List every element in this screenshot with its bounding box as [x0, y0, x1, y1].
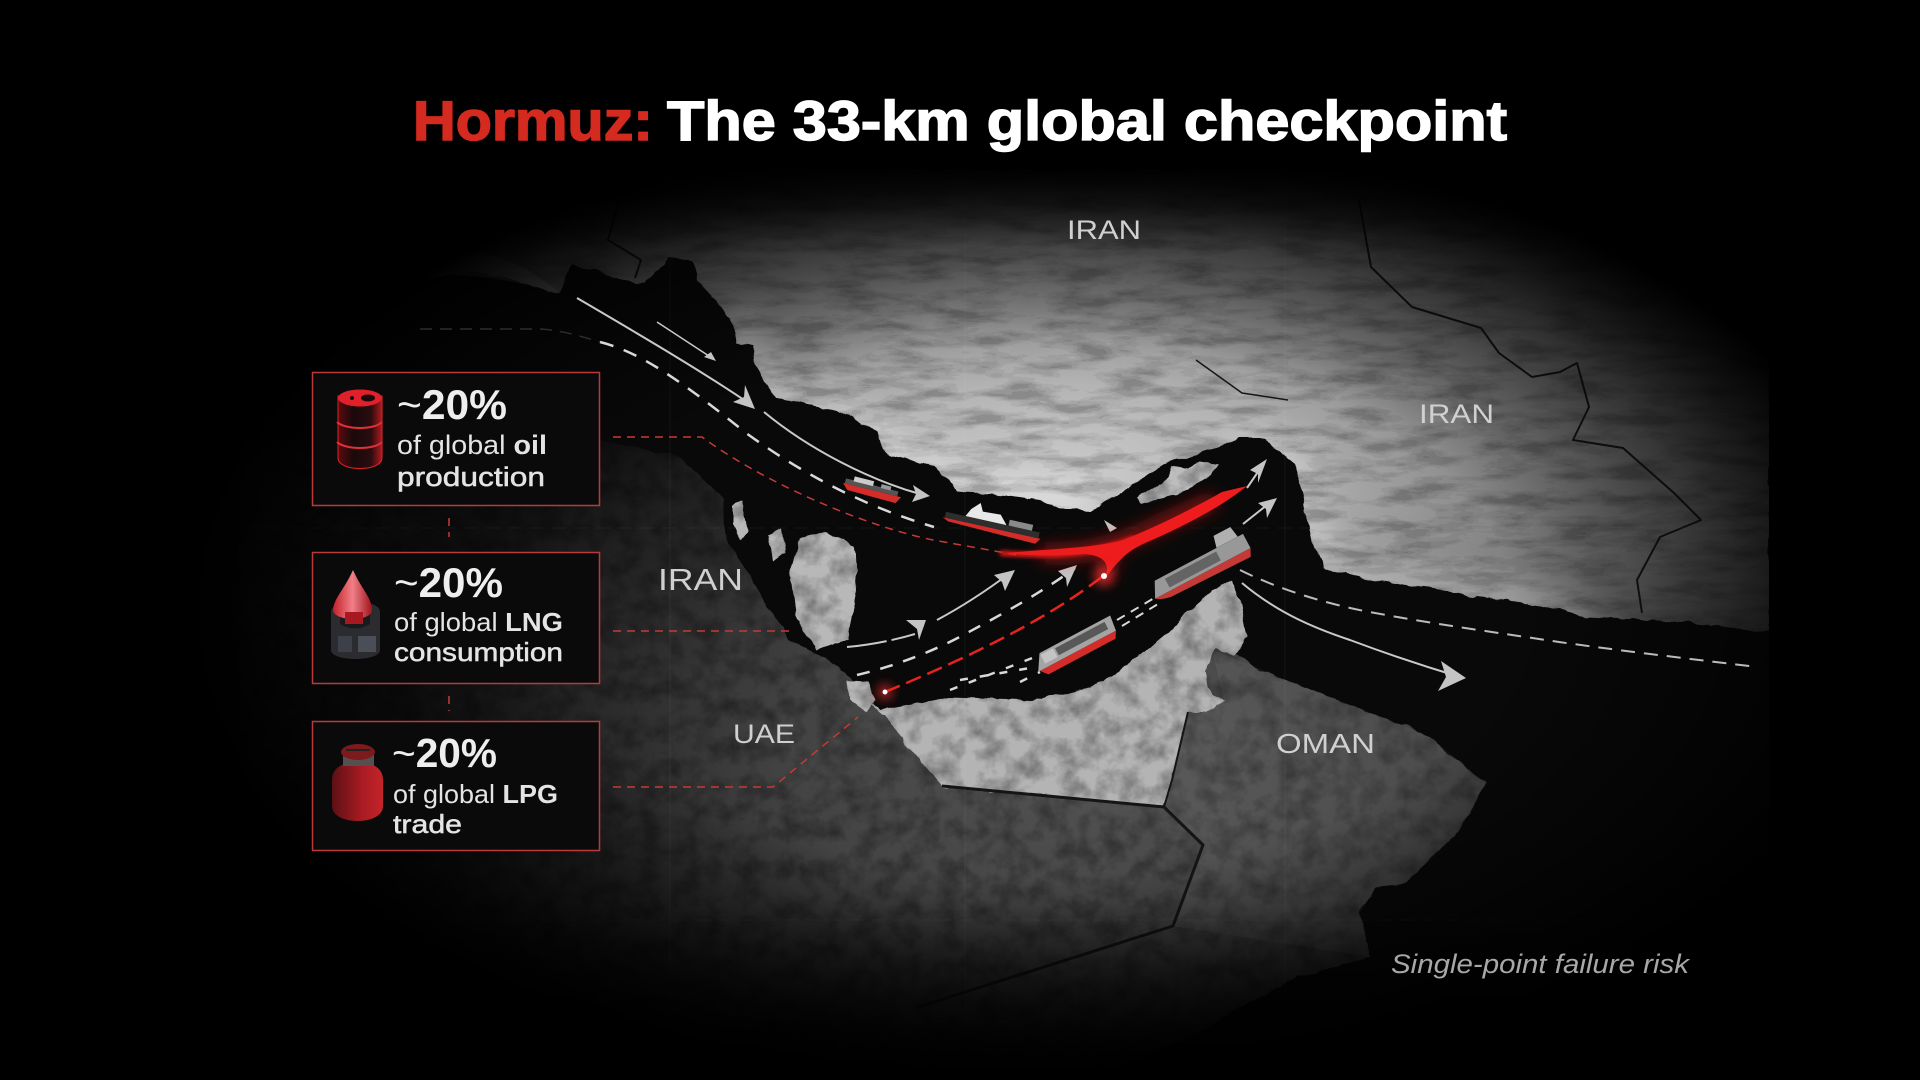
red stream soft	[1000, 538, 1135, 555]
leader: LPG	[613, 717, 858, 787]
red stream fan	[1005, 486, 1247, 578]
red glow	[1040, 500, 1215, 575]
panel: LNG	[312, 552, 600, 684]
red route dashes	[885, 576, 1103, 692]
text: LNG description line 2: consumption	[394, 637, 563, 667]
label: Iran north: IRAN	[1067, 215, 1141, 245]
connector: box 2 to box 3	[448, 696, 450, 711]
land: Iraq strip highlight	[385, 253, 559, 293]
text: oil description line 2: production	[397, 462, 545, 492]
icon: LNG drop and tank	[331, 570, 380, 659]
title: Hormuz:	[413, 89, 653, 152]
lane: between ships dashed	[1117, 597, 1158, 626]
connector: box 1 to box 2	[448, 518, 450, 537]
caption: single-point failure risk: Single-point failure risk	[1391, 949, 1691, 979]
stat: LNG: ~20%	[394, 559, 503, 606]
label: Oman: OMAN	[1276, 728, 1375, 759]
panel: oil	[312, 372, 600, 506]
stat: LPG: ~20%	[392, 730, 497, 776]
hotspot west	[877, 684, 893, 700]
text: LPG description line 1: of global LPG	[393, 779, 558, 809]
text: LPG description line 2: trade	[393, 809, 462, 839]
lane: outbound	[1240, 570, 1757, 667]
ship 1	[841, 474, 903, 504]
arrowheads	[704, 352, 1466, 691]
top fade	[0, 160, 1920, 250]
lane: inbound solid	[577, 298, 750, 404]
icon: oil barrel	[337, 390, 382, 468]
red leader lines	[449, 437, 1017, 787]
icon: LPG cylinder	[332, 744, 383, 821]
faint grid lines	[200, 170, 1760, 1060]
title: The 33-km global checkpoint	[667, 89, 1507, 152]
land: Qeshm island	[1137, 462, 1220, 503]
lane: small dashes near UAE coast	[950, 655, 1040, 690]
leader: LNG	[613, 630, 790, 632]
lane: lower solid	[847, 634, 915, 647]
stat: oil: ~20%	[397, 381, 507, 428]
hotspot east	[1094, 566, 1114, 586]
shipping lanes and arrows	[420, 298, 1757, 691]
ship 3	[1142, 523, 1254, 606]
label: Iran east: IRAN	[1419, 399, 1494, 429]
label: UAE: UAE	[733, 719, 795, 749]
text: LNG description line 1: of global LNG	[394, 607, 563, 637]
panel: LPG	[312, 722, 600, 850]
label: Iran west: IRAN	[658, 562, 743, 597]
land: Bahrain islands	[733, 500, 876, 712]
country labels	[658, 215, 1494, 759]
land: Arabian Peninsula and Oman	[240, 440, 1485, 1080]
water	[200, 170, 1769, 1080]
text: oil description line 1: of global oil	[397, 430, 547, 460]
right edge cut	[1769, 0, 1920, 1080]
land: Qatar	[790, 530, 857, 650]
lane: inbound dashed	[600, 342, 934, 527]
border lines	[608, 200, 1701, 1008]
land: UAE	[860, 580, 1247, 807]
lane: exit arrows	[1243, 466, 1272, 524]
ship 2	[941, 496, 1045, 545]
leader: oil	[613, 437, 1017, 555]
map: Persian Gulf region	[296, 187, 1769, 1022]
land: Iran	[513, 188, 1769, 632]
land: Oman highlight	[1164, 650, 1485, 957]
ship 4	[1031, 616, 1121, 678]
lane: lower dashed	[857, 568, 1075, 675]
bottom fade	[0, 900, 1920, 1080]
chokepoint red route and glow	[877, 486, 1247, 700]
